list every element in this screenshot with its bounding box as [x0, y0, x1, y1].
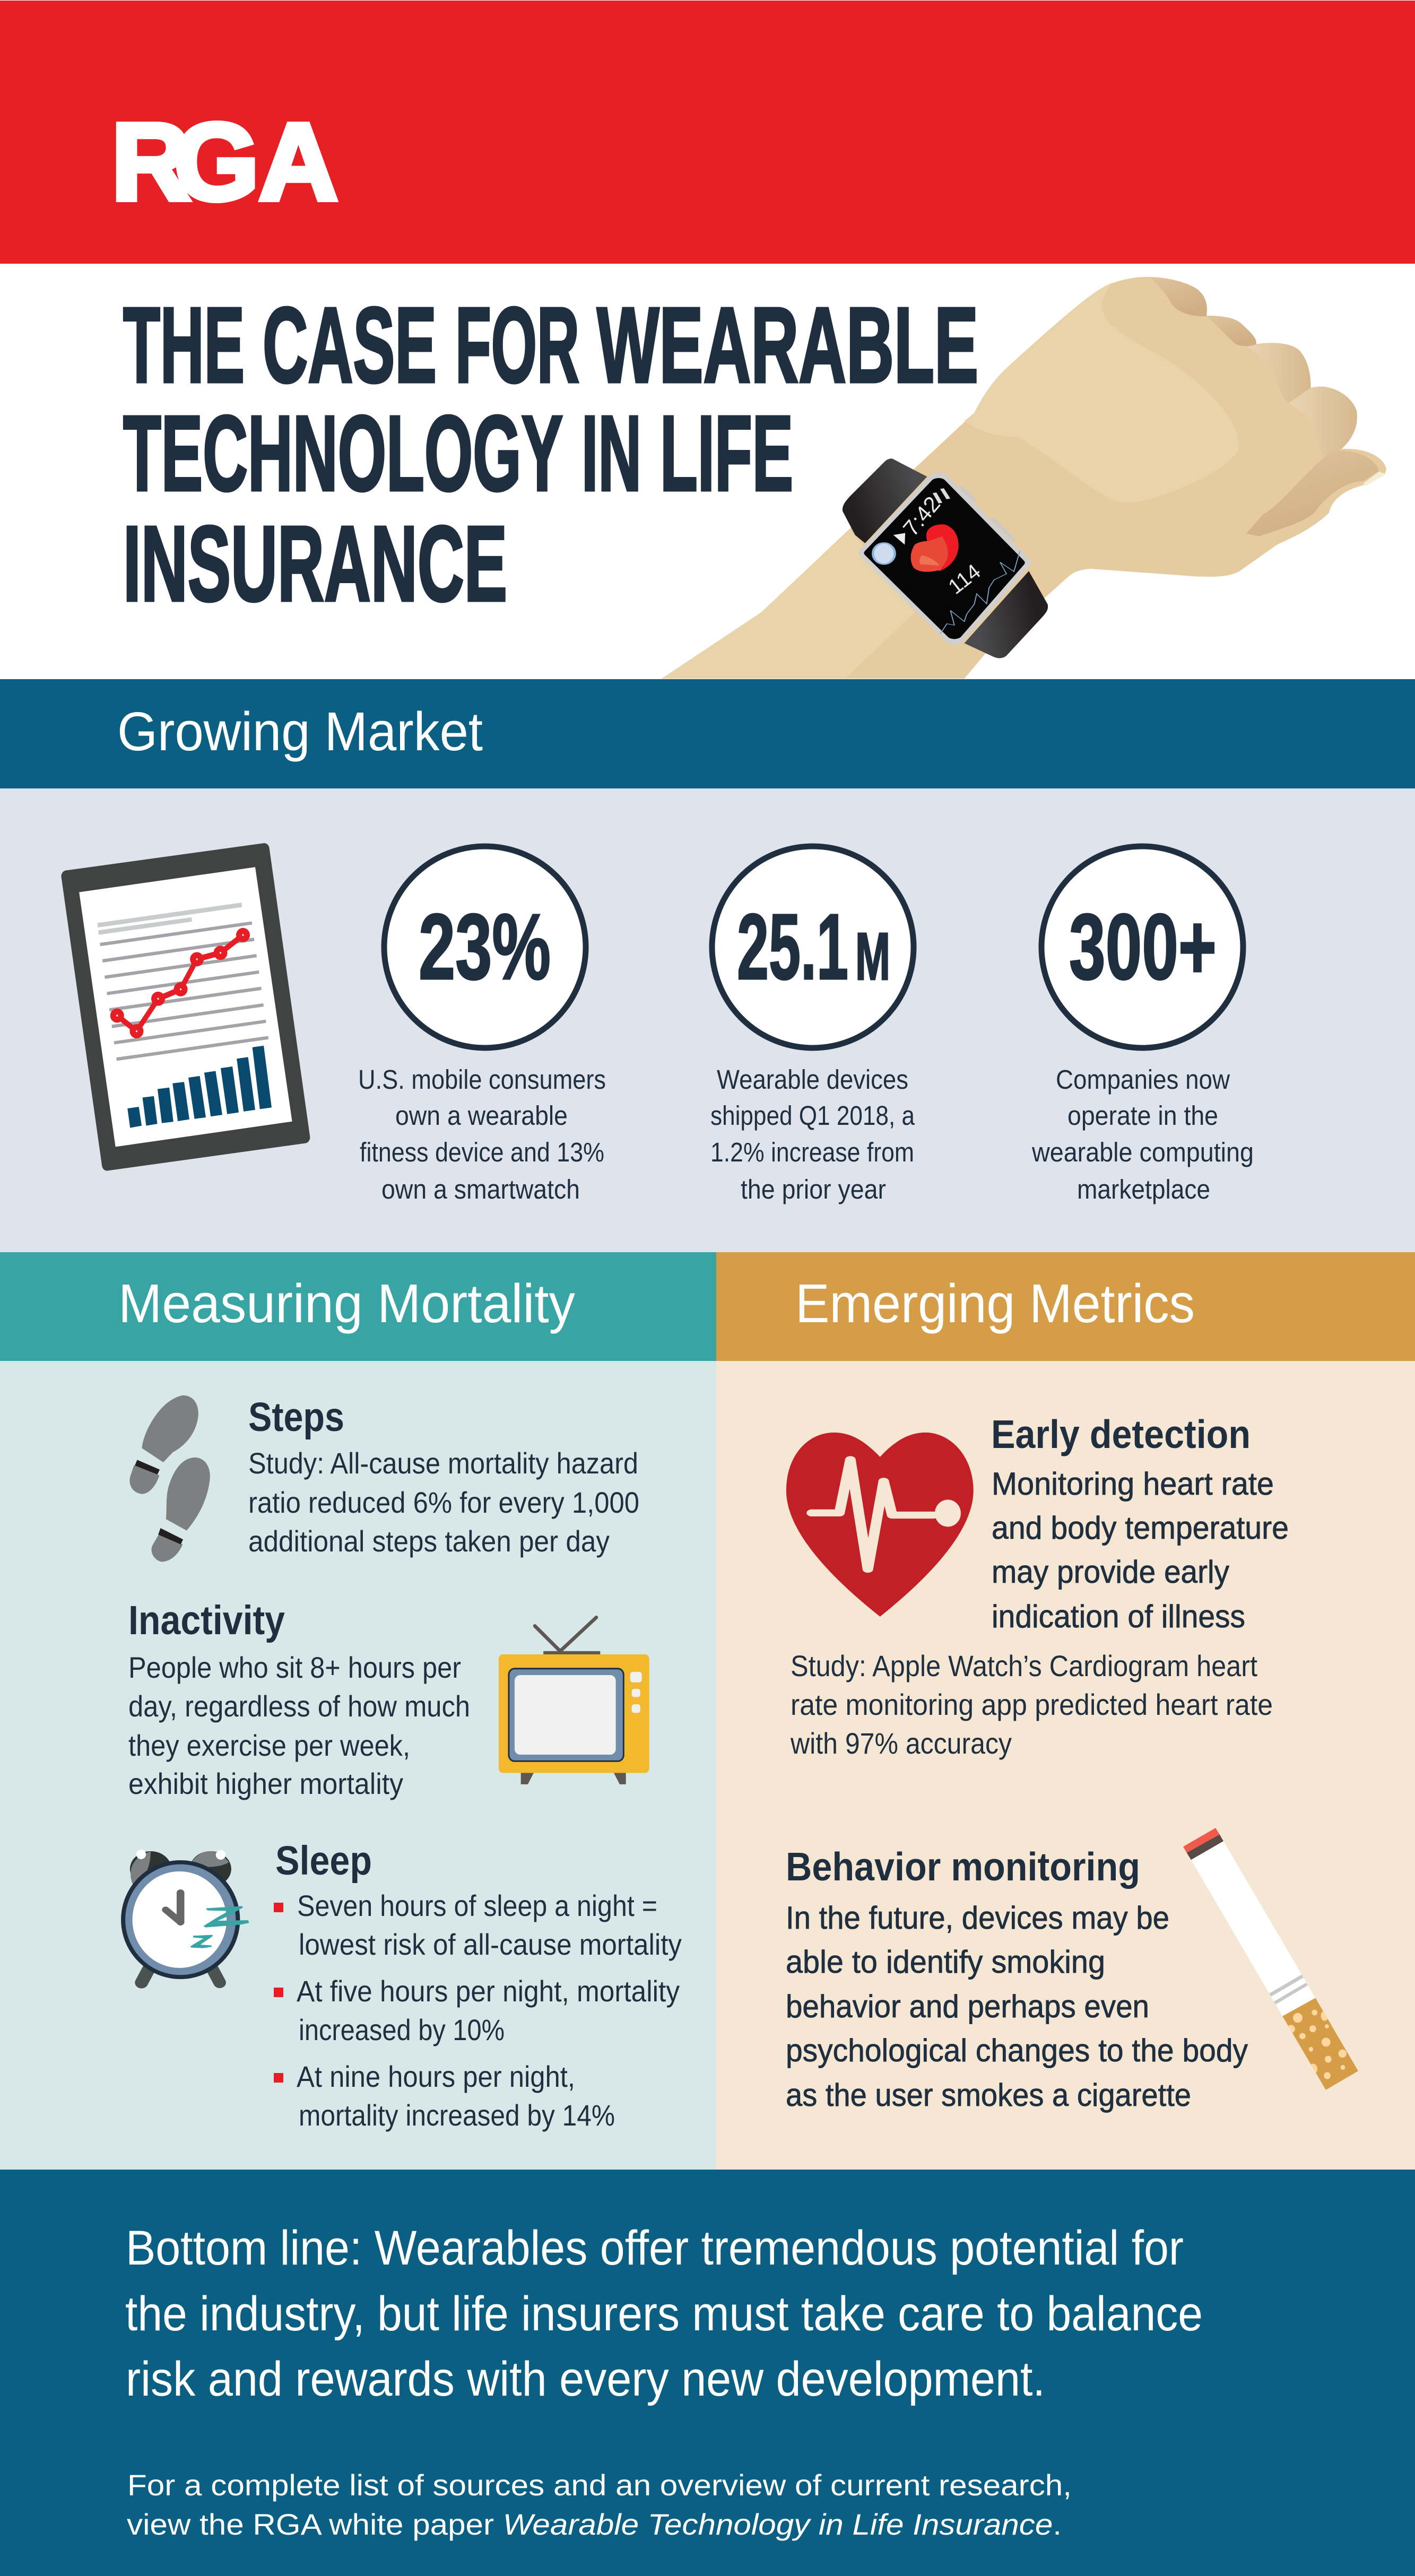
block: behavior monitoring: [786, 1844, 1248, 2113]
block: sleep: [274, 1838, 682, 2132]
bottom line statement: [125, 2221, 1203, 2406]
panel: emerging metrics: [716, 1252, 1415, 2170]
watch time: 7:42: [898, 491, 945, 541]
block: behavior monitoring: able to identify smoking: [786, 1944, 1105, 1980]
stat: 25.1M: M: [855, 919, 890, 994]
bullet: seven hours: [274, 1889, 682, 1961]
block: behavior monitoring: behavior and perhaps even: [786, 1989, 1149, 2024]
stat: 25.1M: 1.2% increase from: [710, 1137, 914, 1167]
stat: 300+: wearable computing: [1031, 1137, 1254, 1167]
stat: 300+: Companies now: [1056, 1064, 1230, 1095]
illustration: hand wearing smartwatch: [662, 277, 1386, 679]
sources note: [127, 2468, 1072, 2541]
title: WEARABLE: [597, 285, 978, 405]
block: early detection: Monitoring heart rate: [992, 1466, 1274, 1502]
stat: 25.1M: the prior year: [741, 1174, 886, 1204]
header band with logo: [0, 1, 1415, 264]
block: inactivity: People who sit 8+ hours per: [128, 1651, 461, 1684]
block: behavior monitoring: as the user smokes a cigarette: [786, 2077, 1191, 2113]
title: INSURANCE: [123, 504, 507, 623]
sources note: view the RGA white paper Wearable Technology in Life Insurance .: [127, 2508, 1062, 2541]
bullet: seven hours: lowest risk of all-cause mortality: [299, 1928, 682, 1961]
block: apple watch study: Study: Apple Watch’s Cardiogram heart: [791, 1649, 1257, 1682]
title: IN: [581, 393, 641, 513]
icon: alarm clock: [121, 1850, 249, 1983]
panel: measuring mortality: [0, 1252, 716, 2170]
stat: 23%: own a wearable: [395, 1100, 568, 1131]
bullet: five hours: increased by 10%: [299, 2013, 505, 2046]
block: early detection: indication of illness: [992, 1599, 1245, 1634]
bullet: seven hours: Seven hours of sleep a night =: [297, 1889, 657, 1922]
icon: footprints: [129, 1395, 210, 1562]
bottom line statement: the industry, but life insurers must take care to balance: [125, 2287, 1203, 2341]
stat: 300+: marketplace: [1077, 1174, 1210, 1204]
bullet: five hours: At five hours per night, mortality: [297, 1974, 680, 2008]
block: apple watch study: with 97% accuracy: [790, 1727, 1012, 1760]
heading band: Measuring Mortality: Measuring Mortality: [118, 1273, 575, 1334]
bottom line statement: risk and rewards with every new development.: [126, 2352, 1045, 2406]
block: inactivity: Inactivity: [128, 1598, 285, 1643]
block: steps: additional steps taken per day: [248, 1524, 610, 1558]
section band: Growing Market: [0, 679, 1415, 788]
icon: heart with pulse: [786, 1433, 974, 1617]
panel: growing market: [0, 788, 1415, 1252]
sources note: For a complete list of sources and an overview of current research,: [127, 2468, 1072, 2502]
block: behavior monitoring: In the future, devices may be: [786, 1900, 1169, 1936]
logo: RGA: RGA: [111, 101, 338, 223]
block: steps: Study: All-cause mortality hazard: [248, 1446, 638, 1480]
title: LIFE: [660, 393, 793, 513]
block: steps: [248, 1394, 639, 1558]
title: FOR: [455, 285, 579, 405]
block: early detection: may provide early: [992, 1554, 1229, 1590]
bullet: five hours: [274, 1974, 680, 2046]
stat: 25.1M: Wearable devices: [717, 1064, 908, 1095]
bottom line statement: Bottom line: Wearables offer tremendous potential for: [126, 2221, 1184, 2275]
stat: 300+: [1031, 846, 1254, 1204]
block: steps: Steps: [248, 1394, 344, 1440]
block: inactivity: they exercise per week,: [128, 1729, 410, 1762]
title: [123, 285, 978, 623]
block: behavior monitoring: psychological changes to the body: [786, 2033, 1248, 2068]
block: early detection: Early detection: [991, 1412, 1251, 1456]
block: behavior monitoring: Behavior monitoring: [786, 1844, 1140, 1889]
heading band: Emerging Metrics: [716, 1252, 1415, 1361]
title: TECHNOLOGY: [123, 393, 563, 513]
stat: 23%: fitness device and 13%: [360, 1137, 604, 1167]
icon: tablet with charts: [66, 849, 305, 1165]
heading band: Emerging Metrics: Emerging Metrics: [795, 1273, 1195, 1334]
icon: television: [499, 1617, 649, 1784]
stat: 23%: U.S. mobile consumers: [358, 1064, 606, 1095]
panel: bottom line: [0, 2170, 1415, 2576]
block: apple watch study: [790, 1649, 1273, 1760]
bullet: nine hours: mortality increased by 14%: [299, 2098, 615, 2132]
icon: cigarette: [1183, 1828, 1358, 2090]
stat: 300+: operate in the: [1067, 1100, 1218, 1131]
stat: 23%: 23%: [419, 895, 551, 999]
block: inactivity: [128, 1598, 470, 1800]
block: steps: ratio reduced 6% for every 1,000: [248, 1486, 639, 1519]
stat: 300+: 300+: [1069, 895, 1217, 999]
title: THE: [123, 285, 245, 405]
stat: 25.1M: 25.1: [737, 895, 848, 999]
block: inactivity: day, regardless of how much: [128, 1689, 470, 1723]
stat: 23%: [358, 846, 606, 1204]
stat: 25.1M: shipped Q1 2018, a: [710, 1100, 915, 1131]
block: early detection: [991, 1412, 1289, 1634]
stat: 25.1M: [710, 846, 915, 1204]
block: apple watch study: rate monitoring app predicted heart rate: [791, 1688, 1273, 1721]
stat: 23%: own a smartwatch: [381, 1174, 580, 1204]
watch heart rate: 114: [944, 560, 985, 599]
block: inactivity: exhibit higher mortality: [128, 1767, 403, 1800]
block: sleep: Sleep: [275, 1838, 372, 1884]
bullet: nine hours: At nine hours per night,: [297, 2060, 575, 2093]
title: CASE: [263, 285, 437, 405]
block: early detection: and body temperature: [992, 1510, 1289, 1546]
section band: Growing Market: Growing Market: [117, 701, 483, 762]
heading band: Measuring Mortality: [0, 1252, 716, 1361]
bullet: nine hours: [274, 2060, 615, 2132]
